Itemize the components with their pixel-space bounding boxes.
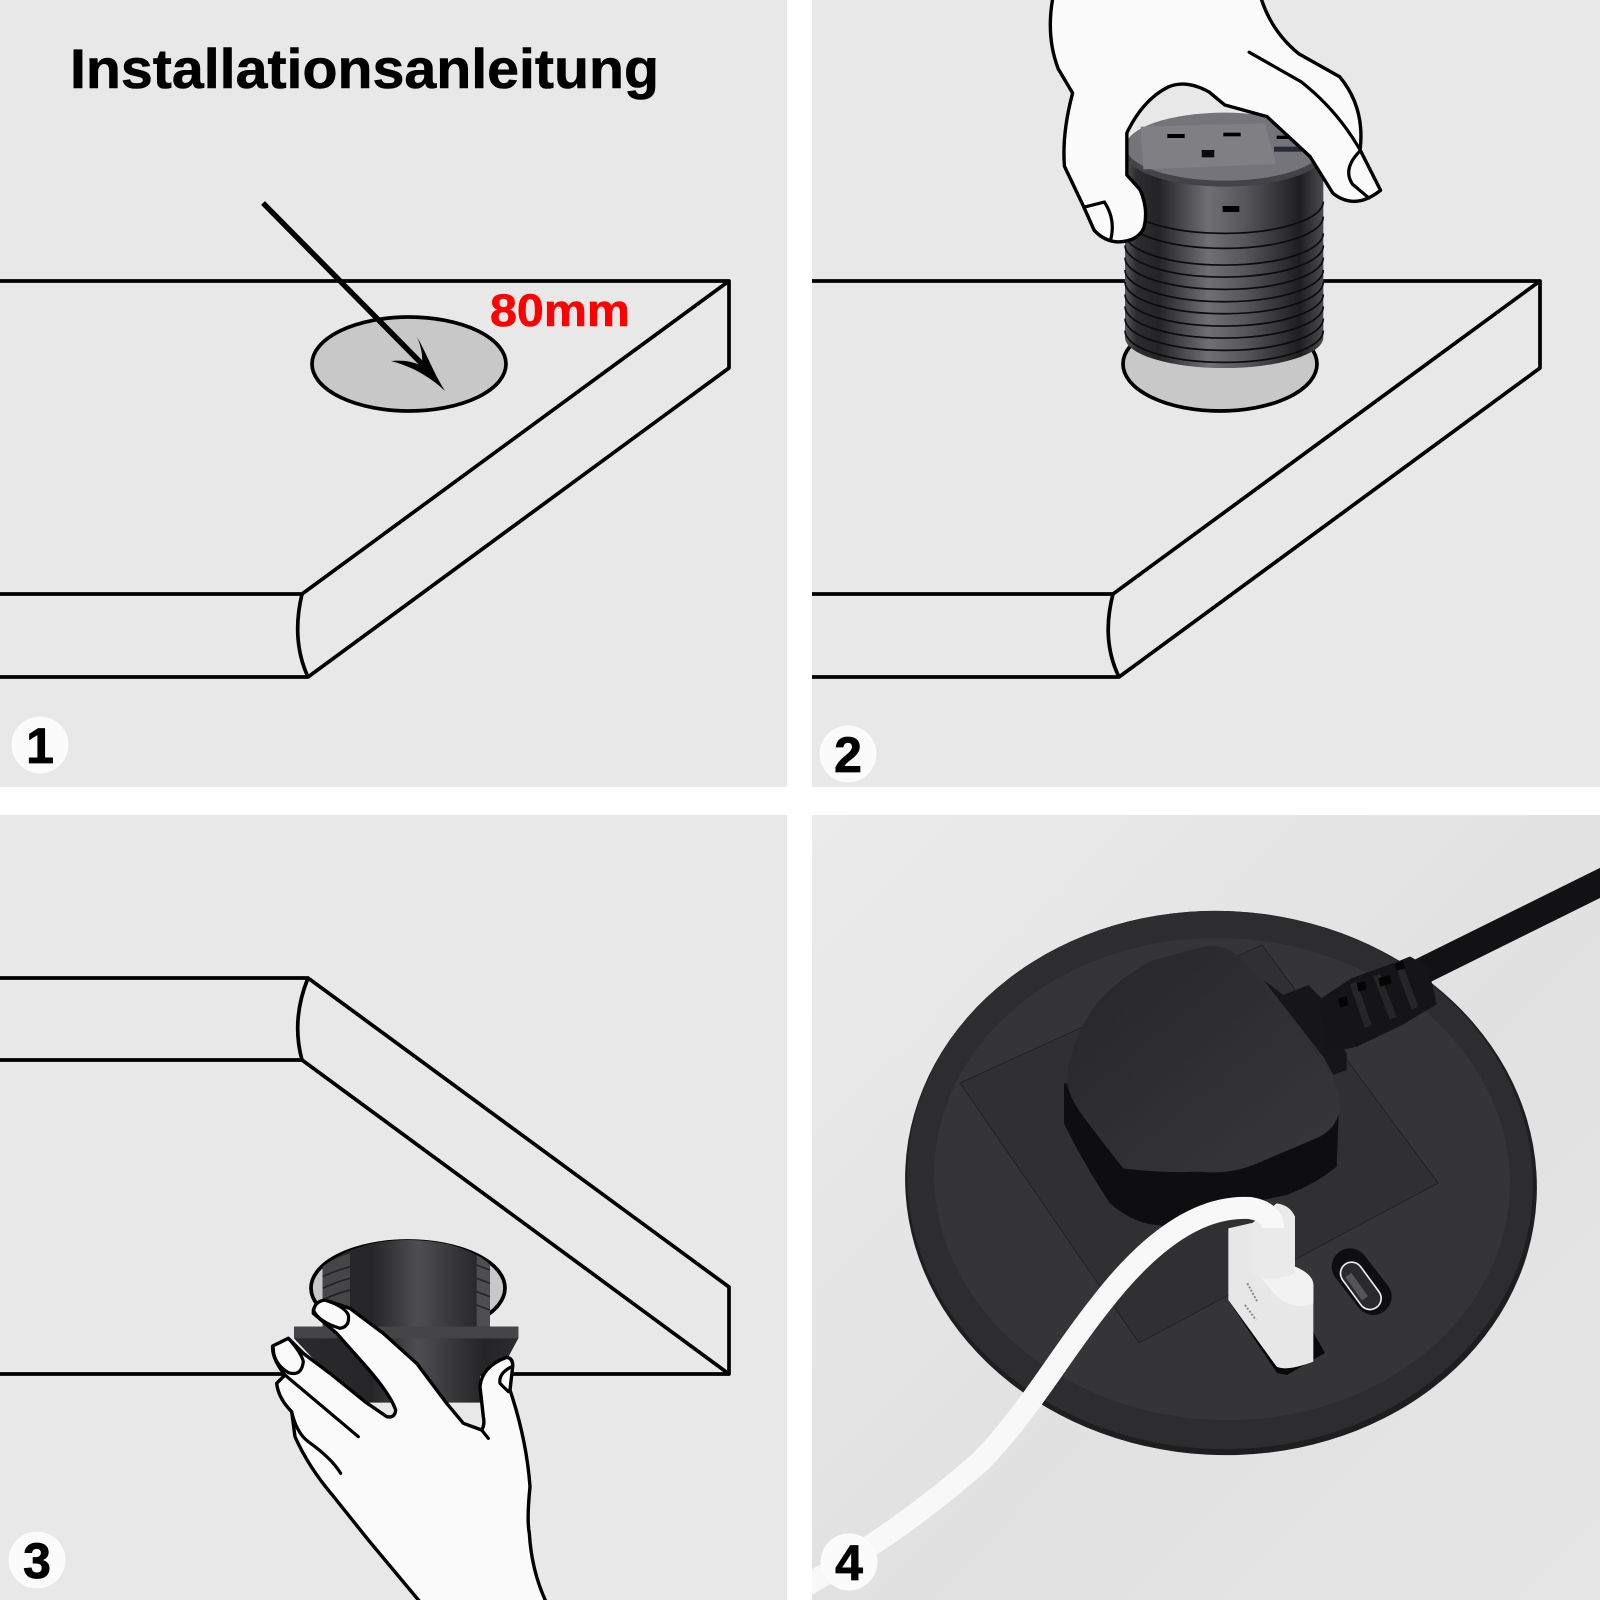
step number 3 <box>8 1532 66 1589</box>
tabletop outline <box>811 281 1540 677</box>
step number 2 <box>820 726 876 783</box>
desk grommet disc <box>891 895 1551 1471</box>
panel 2: insert the socket <box>811 0 1600 787</box>
hand holding socket <box>1050 0 1381 242</box>
step number 2: 2 <box>834 727 862 783</box>
step number 3: 3 <box>23 1533 51 1589</box>
socket cylinder <box>1125 113 1324 368</box>
socket body with flange <box>294 1240 518 1403</box>
hole <box>1121 346 1319 413</box>
hole <box>311 1241 505 1335</box>
tabletop outline <box>0 281 729 677</box>
panel 1: drill the hole <box>0 0 787 787</box>
power cable <box>1400 873 1600 982</box>
USB port <box>1228 1300 1325 1375</box>
step number 4 <box>820 1534 878 1591</box>
hand from below <box>273 1300 548 1600</box>
USB-C port <box>1348 1267 1373 1298</box>
USB-A connector <box>1228 1203 1313 1368</box>
title: Installationsanleitung <box>70 37 659 100</box>
tabletop outline seen from below <box>0 978 729 1374</box>
dimension label: 80mm <box>490 285 630 336</box>
step number 1: 1 <box>26 718 54 774</box>
step number 4: 4 <box>835 1535 863 1591</box>
hole 80mm <box>312 317 506 411</box>
panel 3: fasten from below <box>0 815 787 1600</box>
arrow pointing to hole <box>263 203 445 391</box>
white USB cable <box>795 1208 1273 1592</box>
cord strain relief <box>1263 958 1435 1075</box>
UK plug <box>1064 946 1435 1226</box>
panel 4: finished installation <box>795 815 1600 1600</box>
step number 1 <box>12 716 68 774</box>
